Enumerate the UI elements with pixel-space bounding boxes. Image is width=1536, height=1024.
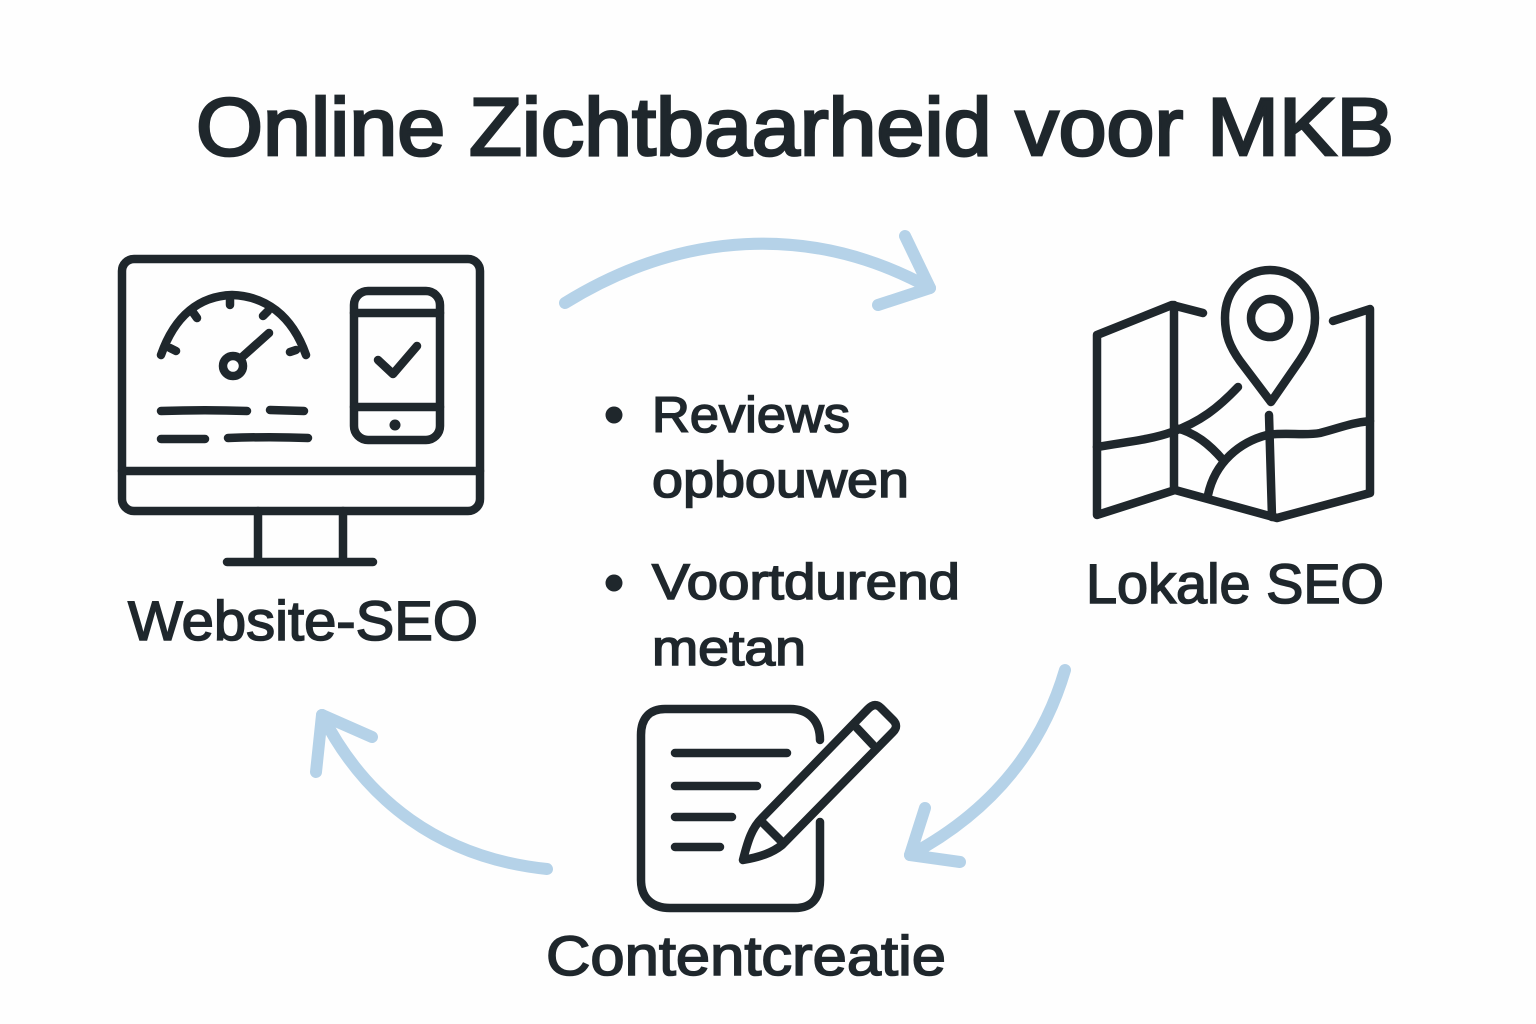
map roads (1097, 387, 1238, 447)
map folds (1174, 305, 1272, 517)
text: opbouwen: opbouwen (652, 452, 909, 508)
text: Reviews: Reviews (652, 387, 850, 443)
arrow: contentcreatie to website-SEO (316, 715, 547, 869)
label: Contentcreatie: Contentcreatie (546, 924, 946, 987)
icon: document with pencil (641, 705, 896, 908)
label: Website-SEO: Website-SEO (128, 589, 478, 652)
phone (354, 291, 440, 440)
icon: map with location pin (1097, 270, 1370, 518)
pencil (743, 705, 896, 860)
document lines (675, 753, 787, 847)
bullet 2 (606, 574, 622, 592)
text lines (161, 410, 308, 439)
monitor stand (227, 511, 373, 562)
title: Online Zichtbaarheid voor MKB (196, 82, 1394, 173)
text: Voortdurend: Voortdurend (652, 554, 960, 610)
location pin (1225, 270, 1315, 402)
document outline (641, 709, 820, 908)
map outline (1097, 305, 1370, 518)
arrow: lokale SEO to contentcreatie (910, 670, 1065, 862)
speed gauge (161, 295, 306, 376)
icon: monitor with gauge and phone (122, 259, 480, 562)
monitor divider (122, 467, 480, 475)
monitor frame (122, 259, 480, 511)
label: Lokale SEO: Lokale SEO (1086, 552, 1384, 615)
arrow: website-SEO to lokale SEO (565, 236, 930, 305)
bullet list (606, 387, 960, 676)
text: metan: metan (652, 620, 806, 676)
bullet 1 (606, 406, 622, 424)
